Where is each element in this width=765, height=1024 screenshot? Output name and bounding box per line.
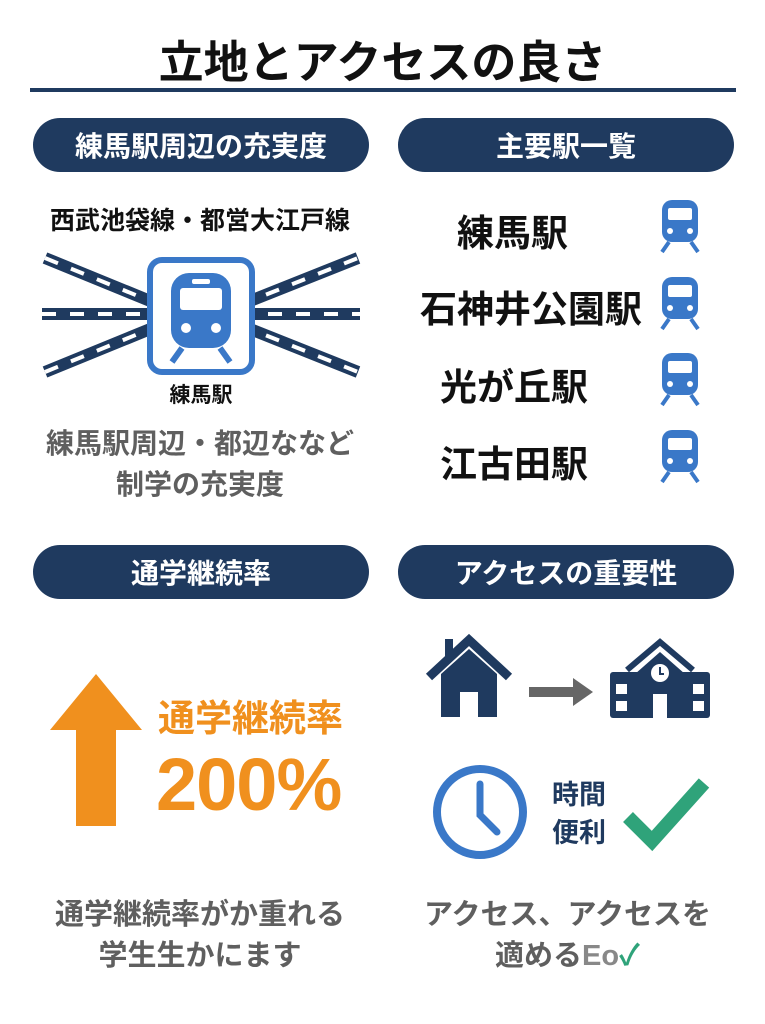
heading: アクセスの重要性: アクセスの重要性 <box>455 558 677 589</box>
icon: check <box>623 778 710 852</box>
text: 時間便利: 便利 <box>552 818 606 848</box>
station list: 光が丘駅 <box>440 367 588 408</box>
text: retention <box>55 898 345 972</box>
icons: home to school <box>426 634 710 718</box>
stat label: 通学継続率 <box>158 698 343 739</box>
text: description: 制学の充実度 <box>116 469 284 500</box>
heading: アクセスの重要性 <box>398 545 734 599</box>
text: access: 適めるEo✓ <box>495 940 640 972</box>
icons: trains <box>660 200 700 484</box>
heading: 通学継続率: 通学継続率 <box>131 558 271 589</box>
stat value: 200% <box>156 743 341 826</box>
heading: 練馬駅周辺の充実度: 練馬駅周辺の充実度 <box>75 131 327 162</box>
text: access <box>424 899 711 972</box>
text: 時間便利 <box>552 780 606 848</box>
heading: 通学継続率 <box>33 545 369 599</box>
heading: 主要駅一覧 <box>398 118 734 172</box>
station list: 練馬駅 <box>457 213 568 254</box>
text: retention: 通学継続率がか重れる <box>55 899 345 931</box>
icon: clock <box>433 765 527 859</box>
title: 立地とアクセスの良さ <box>159 37 606 88</box>
text: 時間便利: 時間 <box>552 780 606 810</box>
text: description: 練馬駅周辺・都辺ななど <box>46 428 354 459</box>
icon: up arrow <box>50 674 142 826</box>
line names: 西武池袋線・都営大江戸線 <box>50 207 350 235</box>
station list <box>420 213 642 485</box>
diagram: station tracks: 練馬駅 <box>170 384 232 407</box>
text: retention: 学生生かにます <box>98 940 302 972</box>
heading: 練馬駅周辺の充実度 <box>33 118 369 172</box>
diagram: station tracks <box>42 252 360 407</box>
text: access: アクセス、アクセスを <box>424 899 711 931</box>
station list: 石神井公園駅 <box>420 289 642 330</box>
heading: 主要駅一覧: 主要駅一覧 <box>496 131 636 162</box>
text: description <box>46 428 354 500</box>
station list: 江古田駅 <box>440 444 588 485</box>
